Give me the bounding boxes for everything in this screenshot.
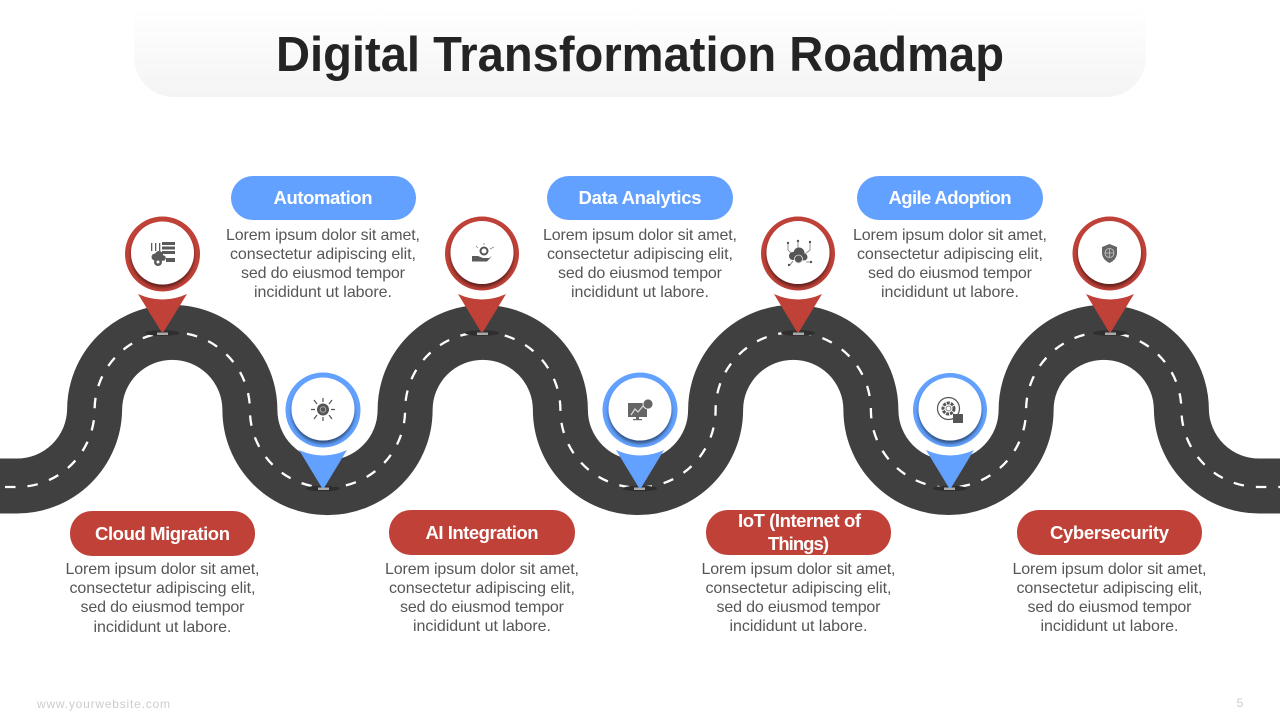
pin 1: cloud migration (125, 216, 200, 336)
icon: cloud network (787, 240, 812, 266)
block: data analytics (543, 176, 737, 301)
pin 6: agile adoption (913, 373, 987, 491)
block: agile adoption: consectetur adipiscing elit, (857, 246, 1043, 263)
block: IoT: IoT (Internet of (738, 510, 862, 531)
footer website: www.yourwebsite.com (36, 697, 170, 711)
block: agile adoption: Lorem ipsum dolor sit amet, (853, 227, 1047, 244)
pin 4: data analytics (602, 372, 678, 491)
pin 2: automation (286, 372, 360, 491)
block: automation: sed do eiusmod tempor (241, 265, 406, 282)
block: cybersecurity: consectetur adipiscing elit, (1016, 580, 1202, 597)
block: cloud migration (66, 511, 260, 636)
icon: analytics monitor (628, 399, 653, 420)
title banner (134, 8, 1146, 97)
title: Digital Transformation Roadmap (276, 28, 1004, 82)
pin 7: cybersecurity (1072, 216, 1146, 336)
block: AI integration: sed do eiusmod tempor (400, 599, 565, 616)
block: AI integration: incididunt ut labore. (413, 618, 551, 635)
pin 3: AI integration (445, 216, 519, 336)
block: IoT (702, 510, 896, 635)
icon: hand with gear (472, 243, 494, 262)
block: automation: Lorem ipsum dolor sit amet, (226, 227, 420, 244)
block: cybersecurity: Lorem ipsum dolor sit amet, (1012, 561, 1206, 578)
block: AI integration (385, 510, 579, 635)
winding road (0, 332, 1280, 488)
block: IoT: sed do eiusmod tempor (716, 599, 881, 616)
block: cloud migration: Cloud Migration (95, 523, 230, 544)
block: agile adoption: sed do eiusmod tempor (868, 265, 1033, 282)
block: agile adoption (853, 176, 1047, 301)
icon: gear network (311, 398, 335, 421)
block: IoT: consectetur adipiscing elit, (706, 580, 892, 597)
icon: gear cycle with box (938, 398, 963, 423)
block: cybersecurity: sed do eiusmod tempor (1028, 599, 1192, 616)
icon: cloud server (151, 242, 175, 266)
block: cybersecurity: incididunt ut labore. (1040, 618, 1178, 635)
block: IoT: Things) (768, 533, 829, 554)
block: cloud migration: sed do eiusmod tempor (80, 599, 245, 616)
block: cloud migration: consectetur adipiscing elit, (70, 580, 256, 597)
block: agile adoption: incididunt ut labore. (881, 284, 1019, 301)
page number: 5 (1237, 696, 1244, 710)
block: automation: incididunt ut labore. (254, 284, 392, 301)
block: cloud migration: incididunt ut labore. (94, 619, 232, 636)
block: cybersecurity (1012, 510, 1206, 635)
block: data analytics: Data Analytics (578, 187, 702, 208)
pin 5: IoT (761, 216, 835, 336)
block: data analytics: sed do eiusmod tempor (558, 265, 723, 282)
block: data analytics: consectetur adipiscing elit, (547, 246, 733, 263)
block: IoT: incididunt ut labore. (730, 618, 868, 635)
block: automation: consectetur adipiscing elit, (230, 246, 416, 263)
block: data analytics: Lorem ipsum dolor sit amet, (543, 227, 737, 244)
block: AI integration: consectetur adipiscing elit, (389, 580, 575, 597)
block: data analytics: incididunt ut labore. (571, 284, 709, 301)
block: cybersecurity: Cybersecurity (1050, 522, 1170, 543)
block: agile adoption: Agile Adoption (888, 187, 1012, 208)
block: automation: Automation (274, 187, 372, 208)
block: AI integration: Lorem ipsum dolor sit amet, (385, 561, 579, 578)
block: automation (226, 176, 420, 301)
block: IoT: Lorem ipsum dolor sit amet, (702, 561, 896, 578)
icon: shield globe (1102, 244, 1117, 263)
block: cloud migration: Lorem ipsum dolor sit amet, (66, 561, 260, 578)
block: AI integration: AI Integration (426, 522, 538, 543)
